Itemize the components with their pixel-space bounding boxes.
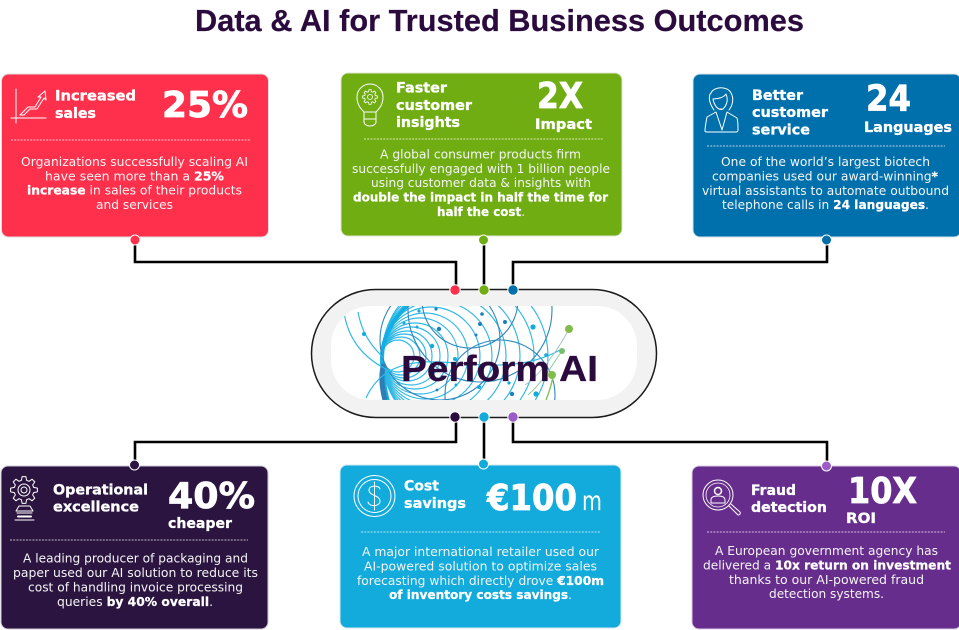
body text: faster customer insights: double the impact in half the time for: [353, 190, 609, 204]
body text: operational excellence: paper used our AI solution to reduce its: [13, 565, 258, 580]
body text: cost savings: AI-powered solution to optimize sales: [364, 558, 597, 574]
body text: increased sales: increase in sales of their products: [27, 182, 242, 198]
body text: operational excellence: [13, 550, 258, 609]
heading: operational excellence: excellence: [53, 500, 139, 516]
body text: faster customer insights: A global consumer products firm: [380, 146, 581, 162]
stat: 2X impact: 2X: [537, 76, 583, 117]
icon: dollar coin: [354, 476, 395, 516]
heading: faster customer insights: [396, 80, 472, 131]
body text: better customer service: [702, 154, 949, 212]
heading: increased sales: sales: [55, 106, 96, 122]
body text: faster customer insights: [352, 146, 610, 219]
body text: fraud detection: A European government agency has: [715, 543, 938, 558]
panel: faster customer insights: [341, 73, 622, 245]
connector lines: [135, 244, 827, 462]
body text: fraud detection: [703, 543, 951, 601]
heading: fraud detection: [751, 483, 827, 516]
heading: cost savings: Cost: [404, 478, 439, 494]
body text: increased sales: and services: [96, 197, 173, 212]
body text: increased sales: [21, 154, 248, 212]
heading: better customer service: Better: [752, 88, 803, 104]
body text: better customer service: companies used our award-winning*: [712, 168, 938, 184]
heading: faster customer insights: Faster: [396, 80, 447, 96]
body text: operational excellence: cost of handling invoice processing: [28, 580, 243, 594]
heading: operational excellence: [53, 482, 148, 516]
body text: increased sales: Organizations successfully scaling AI: [21, 154, 248, 169]
stat: 2X impact: [535, 76, 592, 133]
body text: faster customer insights: using customer data & insights with: [371, 175, 591, 190]
heading: increased sales: [55, 88, 136, 122]
icon: lightbulb with gear: [357, 84, 383, 126]
panel: operational excellence: [1, 460, 268, 629]
heading: faster customer insights: insights: [396, 115, 460, 131]
body text: operational excellence: queries by 40% overall.: [57, 594, 213, 609]
stat: 24 languages: Languages: [864, 120, 952, 136]
heading: cost savings: savings: [404, 496, 466, 512]
connector dot: increased sales: [130, 235, 140, 245]
stat: 40% cheaper: 40%: [168, 476, 255, 517]
heading: cost savings: [404, 478, 466, 512]
heading: fraud detection: Fraud: [751, 483, 796, 499]
body text: faster customer insights: successfully engaged with 1 billion people: [352, 161, 610, 176]
Perform AI wordmark: Perform AI: [401, 348, 598, 389]
stat: 10X ROI: ROI: [846, 511, 876, 527]
stat: 10X ROI: [846, 471, 917, 527]
body text: fraud detection: detection systems.: [769, 586, 884, 601]
body text: increased sales: have seen more than a 25%: [45, 168, 224, 184]
body text: better customer service: One of the world’s largest biotech: [721, 154, 930, 169]
stat: 24 languages: 24: [866, 78, 911, 120]
heading: better customer service: service: [752, 122, 810, 138]
network arc artwork: [344, 306, 573, 400]
body text: better customer service: telephone calls in 24 languages.: [722, 197, 929, 212]
heading: faster customer insights: customer: [396, 98, 472, 114]
body text: faster customer insights: half the cost.: [437, 204, 525, 219]
icon: gear and paper stack: [11, 477, 37, 520]
panel: cost savings: [340, 459, 621, 628]
body text: cost savings: [357, 544, 604, 602]
body text: cost savings: forecasting which directly drove €100m: [357, 573, 604, 588]
connector dot: operational excellence: [130, 460, 140, 470]
heading: better customer service: customer: [752, 105, 828, 121]
body text: cost savings: of inventory costs savings.: [389, 587, 572, 602]
stat: 2X impact: Impact: [535, 117, 592, 133]
pill connector dots: [450, 285, 518, 422]
body text: fraud detection: thanks to our AI-powered fraud: [729, 572, 924, 587]
panel: fraud detection: [692, 461, 959, 629]
body text: cost savings: A major international retailer used our: [362, 544, 600, 559]
connector dot: better customer service: [822, 235, 832, 245]
stat: 10X ROI: 10X: [848, 471, 917, 512]
panel: increased sales: [2, 74, 268, 245]
body text: operational excellence: A leading producer of packaging and: [23, 550, 248, 566]
heading: increased sales: Increased: [55, 88, 136, 104]
icon: support agent: [705, 88, 738, 132]
heading: operational excellence: Operational: [53, 482, 148, 498]
central Perform AI pill: [310, 288, 658, 418]
connector dot: faster customer insights: [478, 235, 488, 245]
body text: better customer service: virtual assistants to automate outbound: [702, 183, 949, 198]
stat: 25%: 25%: [162, 85, 248, 126]
stat: 100 million euros: m: [582, 486, 602, 517]
panel: better customer service: [693, 74, 959, 245]
stat: 100 million euros: €100: [486, 478, 577, 519]
stat: 40% cheaper: cheaper: [168, 516, 232, 532]
connector dot: fraud detection: [822, 461, 832, 471]
heading: fraud detection: detection: [751, 500, 827, 516]
connector dot: cost savings: [478, 459, 488, 469]
heading: better customer service: [752, 88, 828, 138]
body text: fraud detection: delivered a 10x return on investment: [703, 558, 951, 572]
stat: 24 languages: [864, 78, 952, 136]
icon: growth chart: [11, 89, 46, 123]
icon: magnifier with person: [703, 480, 740, 515]
title: Data & AI for Trusted Business Outcomes: [195, 3, 804, 38]
